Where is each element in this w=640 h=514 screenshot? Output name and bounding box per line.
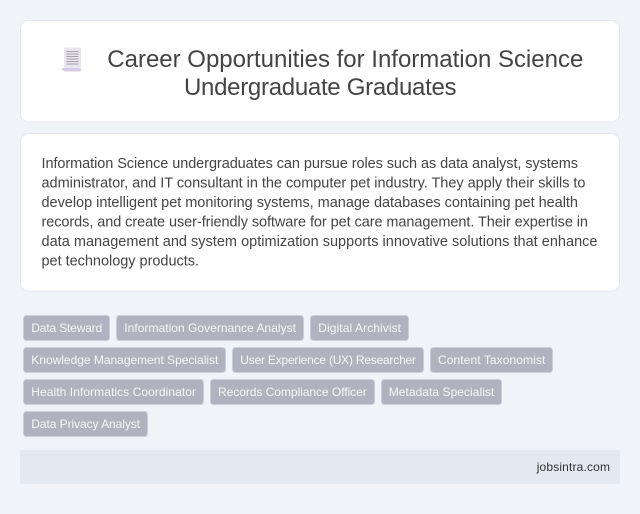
tag: Data Steward [24,316,110,340]
title [107,46,583,101]
text block: description: pet technology products. [42,254,199,270]
tag: Metadata Specialist: Metadata Specialist [389,385,495,399]
title: Undergraduate Graduates [184,74,456,101]
icon: document scroll [62,48,81,72]
text block: description: develop intelligent pet monitoring systems, manage databases containing pet health [42,195,578,211]
tag: Information Governance Analyst: Information Governance Analyst [124,321,297,335]
tag: Records Compliance Officer [210,380,374,404]
tag: Content Taxonomist [430,348,552,372]
tag: Data Privacy Analyst [24,412,148,436]
tag: User Experience (UX) Researcher [232,348,424,372]
title: Career Opportunities for Information Science [107,46,583,73]
tag: Data Privacy Analyst: Data Privacy Analyst [31,417,141,431]
text block: description: administrator, and IT consultant in the computer pet industry. They apply their skills to [42,176,586,192]
tag: Metadata Specialist [382,380,502,404]
tag: Digital Archivist: Digital Archivist [318,321,402,335]
tag: Records Compliance Officer: Records Compliance Officer [218,385,367,399]
tag: Knowledge Management Specialist [24,348,226,372]
tag: User Experience (UX) Researcher: User Experience (UX) Researcher [240,353,416,367]
tag: Content Taxonomist: Content Taxonomist [438,353,546,367]
text block: description: Information Science undergraduates can pursue roles such as data analyst, systems [42,156,578,172]
text block: description: data management and system optimization supports innovative solutions that enhance [42,234,598,250]
text block: description: records, and create user-friendly software for pet care management. Their expertise in [42,214,588,230]
tag: Knowledge Management Specialist: Knowledge Management Specialist [31,353,219,367]
footer [20,450,620,484]
panel: header [20,20,620,122]
tag list [24,316,552,436]
tag: Health Informatics Coordinator [24,380,204,404]
footer: jobsintra.com [536,460,610,474]
tag: Information Governance Analyst [116,316,304,340]
text block: description [42,156,598,270]
tag: Data Steward: Data Steward [31,321,102,335]
panel: description [20,134,620,291]
tag: Digital Archivist [310,316,408,340]
tag: Health Informatics Coordinator: Health Informatics Coordinator [31,385,196,399]
